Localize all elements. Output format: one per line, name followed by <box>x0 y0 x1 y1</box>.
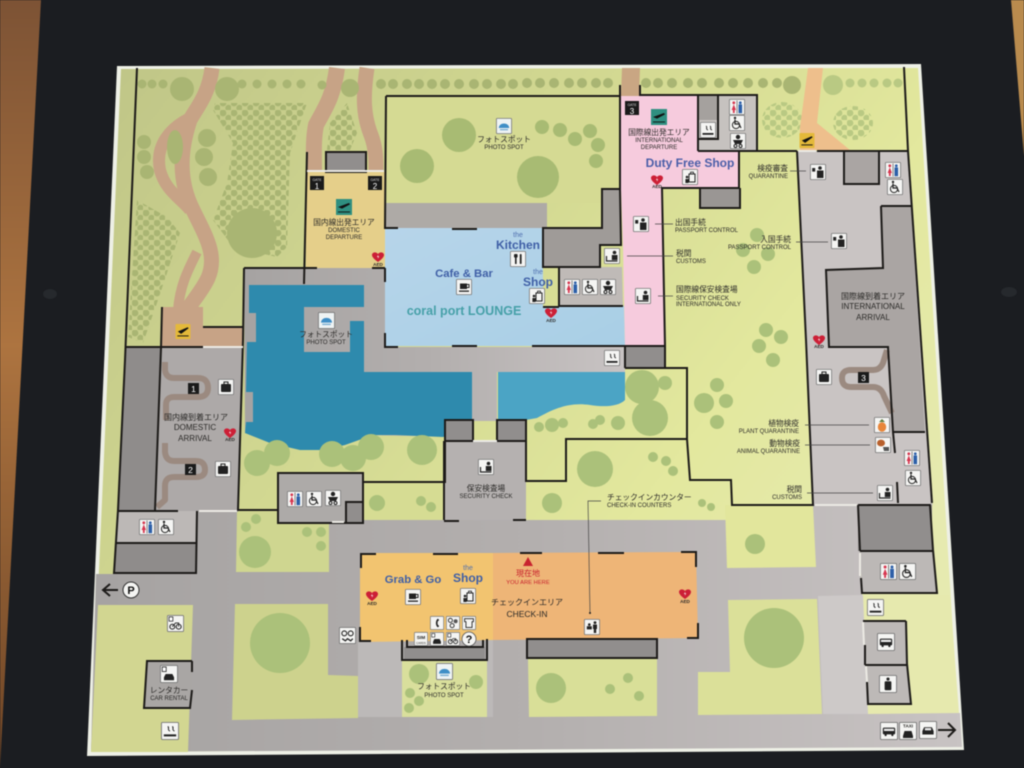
label: domestic departure: DEPARTURE <box>326 235 362 241</box>
AED lounge <box>545 308 557 323</box>
duty free shop: Duty Free Shop <box>646 156 734 170</box>
arrival dark room A <box>844 152 879 184</box>
lounge name: coral port LOUNGE <box>407 304 521 318</box>
label: check-in area: チェックインエリア <box>491 598 563 607</box>
check-in counters callout <box>584 493 692 635</box>
quarantine callout: 検疫審査 <box>757 163 788 173</box>
AED check-in: AED <box>680 599 691 604</box>
customs departure callout <box>604 248 706 265</box>
plant quarantine callout: PLANT QUARANTINE <box>739 429 799 435</box>
restrooms room south of pond <box>278 473 363 523</box>
AED international arrival <box>813 335 825 349</box>
grab and go: Grab & Go <box>385 574 441 586</box>
AED international arrival: AED <box>814 344 825 349</box>
check-in counters callout: チェックインカウンター <box>607 493 692 502</box>
lower garden trees <box>239 228 804 713</box>
baggage claim 2 <box>185 461 231 477</box>
baggage claim 3: 3 <box>861 373 866 383</box>
main pond <box>245 285 472 450</box>
duty free shop <box>646 156 734 185</box>
photo spot south: PHOTO SPOT <box>424 693 464 699</box>
AED check-in <box>679 589 691 604</box>
international arrival floor <box>797 151 933 505</box>
transport arrow <box>880 721 955 740</box>
label: photo spot pond <box>299 330 353 346</box>
icon: gate 2: 2 <box>373 182 378 191</box>
security check <box>460 459 512 500</box>
animal quarantine callout <box>737 437 891 455</box>
domestic dark box <box>114 543 196 573</box>
icon: gate 1: GATE <box>313 178 322 182</box>
car rental room <box>144 661 192 708</box>
AED lounge: AED <box>546 318 557 323</box>
service icons row bottom: CARDS <box>416 641 426 645</box>
customs arrival callout: CUSTOMS <box>772 495 802 501</box>
security check international callout: INTERNATIONAL ONLY <box>676 302 741 308</box>
security check: SECURITY CHECK <box>460 494 512 500</box>
restrooms south of pond <box>287 490 341 507</box>
map sheet <box>87 64 964 756</box>
baggage claim 3 <box>816 369 869 385</box>
mounting screws <box>43 287 1017 299</box>
lounge: cafe and bar: Cafe & Bar <box>435 268 493 280</box>
AED grab and go <box>366 591 378 606</box>
icon: gate 2 <box>368 176 382 191</box>
passport control arrival callout <box>728 233 847 251</box>
road gap greens <box>363 482 444 520</box>
label: international arrival: 国際線到着エリア <box>841 291 905 301</box>
toilet room near lounge <box>559 267 623 306</box>
smoking area near right pond <box>604 350 620 366</box>
domestic arrival restrooms <box>139 519 174 535</box>
you are here marker <box>506 557 550 586</box>
security check: 保安検査場 <box>467 483 506 493</box>
restrooms near lounge <box>564 279 616 295</box>
check-in hall: grab and go side <box>360 553 493 642</box>
photo spot south: フォトスポット <box>417 682 471 691</box>
passport control departure callout: 出国手続 <box>675 217 706 227</box>
arrival restrooms upper <box>885 162 903 195</box>
label: domestic departure <box>313 217 375 241</box>
AED domestic arrival <box>224 428 236 442</box>
passport control arrival callout: PASSPORT CONTROL <box>728 245 792 251</box>
AED international departure <box>651 175 663 189</box>
security check international callout: SECURITY CHECK <box>676 296 729 302</box>
security check international callout: 国際線保安検査場 <box>676 284 738 294</box>
animal quarantine callout: 動物検疫 <box>769 438 800 448</box>
lower gardens <box>91 512 959 752</box>
icon: gate 1: 1 <box>315 182 320 191</box>
courtyard <box>386 96 620 228</box>
AED domestic arrival: AED <box>225 437 236 442</box>
arrow to parking: P <box>127 585 135 597</box>
arrival corridor dark room <box>698 96 718 120</box>
grab and go <box>385 574 441 605</box>
right garden strip over road <box>725 505 816 568</box>
icon: international departure <box>651 109 667 125</box>
small dark boxes <box>326 152 932 660</box>
animal quarantine callout: ANIMAL QUARANTINE <box>737 449 800 455</box>
international upper services room <box>698 96 757 151</box>
service icons row bottom: ? <box>466 634 473 646</box>
lounge: cafe and bar <box>435 268 493 295</box>
security floor <box>445 441 526 520</box>
label: check-in area: CHECK-IN <box>506 609 548 619</box>
lounge: kitchen: Kitchen <box>496 238 540 252</box>
lounge: shop: Shop <box>523 275 553 289</box>
lounge: kitchen <box>496 232 540 267</box>
label: domestic arrival <box>164 412 228 443</box>
icon: photo spot pond <box>318 312 335 329</box>
AED domestic departure: AED <box>373 262 384 267</box>
right restroom room <box>860 550 937 593</box>
label: domestic arrival: 国内線到着エリア <box>164 412 228 422</box>
smoking lower right <box>867 599 884 616</box>
car rental: レンタカー <box>150 686 188 695</box>
AED domestic departure <box>372 252 384 267</box>
label: domestic arrival: ARRIVAL <box>178 434 212 443</box>
label: photo spot pond: PHOTO SPOT <box>306 340 346 346</box>
domestic restroom room <box>115 511 197 543</box>
bike route icon <box>339 627 356 644</box>
label: international departure <box>628 127 690 151</box>
lounge: kitchen: the <box>513 232 523 239</box>
icon: arrivals plane top <box>800 133 814 148</box>
baggage belts <box>157 350 892 507</box>
arrival restrooms lower <box>904 450 921 486</box>
check-in hall: check-in side <box>493 552 698 640</box>
lounge floor <box>385 228 625 346</box>
label: international arrival: INTERNATIONAL <box>841 302 905 311</box>
car rental <box>150 665 188 702</box>
you are here marker: YOU ARE HERE <box>506 580 550 586</box>
check-in counters callout: CHECK-IN COUNTERS <box>607 503 671 509</box>
pink international area <box>621 96 739 346</box>
lounge: shop <box>523 269 553 304</box>
tree masses <box>128 102 873 343</box>
icon: gate 3 <box>625 101 639 116</box>
label: check-in area <box>491 598 563 619</box>
icon: arrivals plane left <box>176 324 190 339</box>
icon: domestic departure <box>336 199 352 215</box>
AED grab and go: AED <box>367 601 378 606</box>
floor: pond surround <box>244 268 625 437</box>
label: domestic departure: 国内線出発エリア <box>313 217 375 227</box>
domestic arrival floor <box>155 347 243 511</box>
passport control departure callout: PASSPORT CONTROL <box>675 228 739 234</box>
label: photo spot pond: フォトスポット <box>299 330 353 339</box>
icon: gate 2: GATE <box>371 178 380 182</box>
icon: gate 3: GATE <box>628 103 637 107</box>
plant quarantine callout <box>739 417 890 435</box>
services: restrooms and smoking <box>700 99 746 149</box>
service icons row bottom <box>414 632 476 646</box>
label: international arrival: ARRIVAL <box>856 313 890 322</box>
label: international arrival <box>841 291 905 322</box>
bus room <box>863 621 907 665</box>
check-in shop <box>453 565 483 604</box>
photo spot south <box>417 663 471 699</box>
customs departure callout: CUSTOMS <box>676 259 706 265</box>
arrival apron path <box>161 307 243 347</box>
domestic arrival dark column <box>118 348 161 510</box>
customs departure callout: 税関 <box>676 248 692 258</box>
passport control departure callout <box>633 216 739 234</box>
arrow to parking <box>103 582 139 598</box>
baggage claim 1: 1 <box>191 384 196 394</box>
icon: gate 3: 3 <box>630 107 635 116</box>
garden paths <box>159 68 376 320</box>
taxi room <box>865 664 911 704</box>
icon: photo spot courtyard <box>496 118 512 134</box>
label: photo spot courtyard: フォトスポット <box>477 135 531 144</box>
label: international departure: INTERNATIONAL <box>635 138 683 144</box>
label: international departure: 国際線出発エリア <box>628 127 690 137</box>
dark rooms near lounge <box>543 189 621 267</box>
baggage claim 2: 2 <box>188 465 193 475</box>
walls <box>114 67 937 708</box>
lower roads <box>91 505 962 752</box>
AED international departure: AED <box>652 184 663 189</box>
label: international departure: DEPARTURE <box>641 145 677 151</box>
label: photo spot courtyard <box>477 135 531 151</box>
quarantine callout: QUARANTINE <box>749 174 788 180</box>
quarantine callout <box>749 163 826 180</box>
parking bike icon <box>167 615 184 632</box>
lounge: shop: the <box>533 269 543 276</box>
check-in shop: the <box>463 565 473 572</box>
floor: domestic departure <box>306 171 385 268</box>
security check international callout <box>635 284 741 308</box>
trees: individual circles <box>137 76 801 258</box>
transport arrow: TAXI <box>903 724 913 728</box>
label: domestic departure: DOMESTIC <box>328 228 360 234</box>
you are here marker: 現在地 <box>516 568 540 578</box>
baggage claim 1 <box>188 379 234 395</box>
right orange path <box>800 68 850 150</box>
passport control arrival callout: 入国手続 <box>760 234 791 244</box>
plant quarantine callout: 植物検疫 <box>768 418 799 428</box>
smoking lower left <box>161 722 179 740</box>
label: photo spot courtyard: PHOTO SPOT <box>484 145 524 151</box>
arrival dark room B <box>826 206 925 432</box>
luggage service icon <box>879 675 897 693</box>
right restrooms <box>880 563 916 580</box>
service icons row bottom: SIM <box>417 635 425 641</box>
icon: gate 1 <box>310 176 324 191</box>
customs arrival callout <box>772 484 893 501</box>
label: domestic arrival: DOMESTIC <box>174 423 216 432</box>
trees: right garden <box>823 75 902 95</box>
right pond <box>498 372 625 421</box>
dark box under pink <box>700 189 740 208</box>
bus stop icon <box>877 633 895 651</box>
gate 3 path <box>621 68 640 96</box>
customs arrival callout: 税関 <box>787 484 802 494</box>
white door strips <box>199 151 867 682</box>
check-in shop: Shop <box>453 571 483 585</box>
service icons row top <box>430 616 476 630</box>
car rental: CAR RENTAL <box>150 696 188 702</box>
